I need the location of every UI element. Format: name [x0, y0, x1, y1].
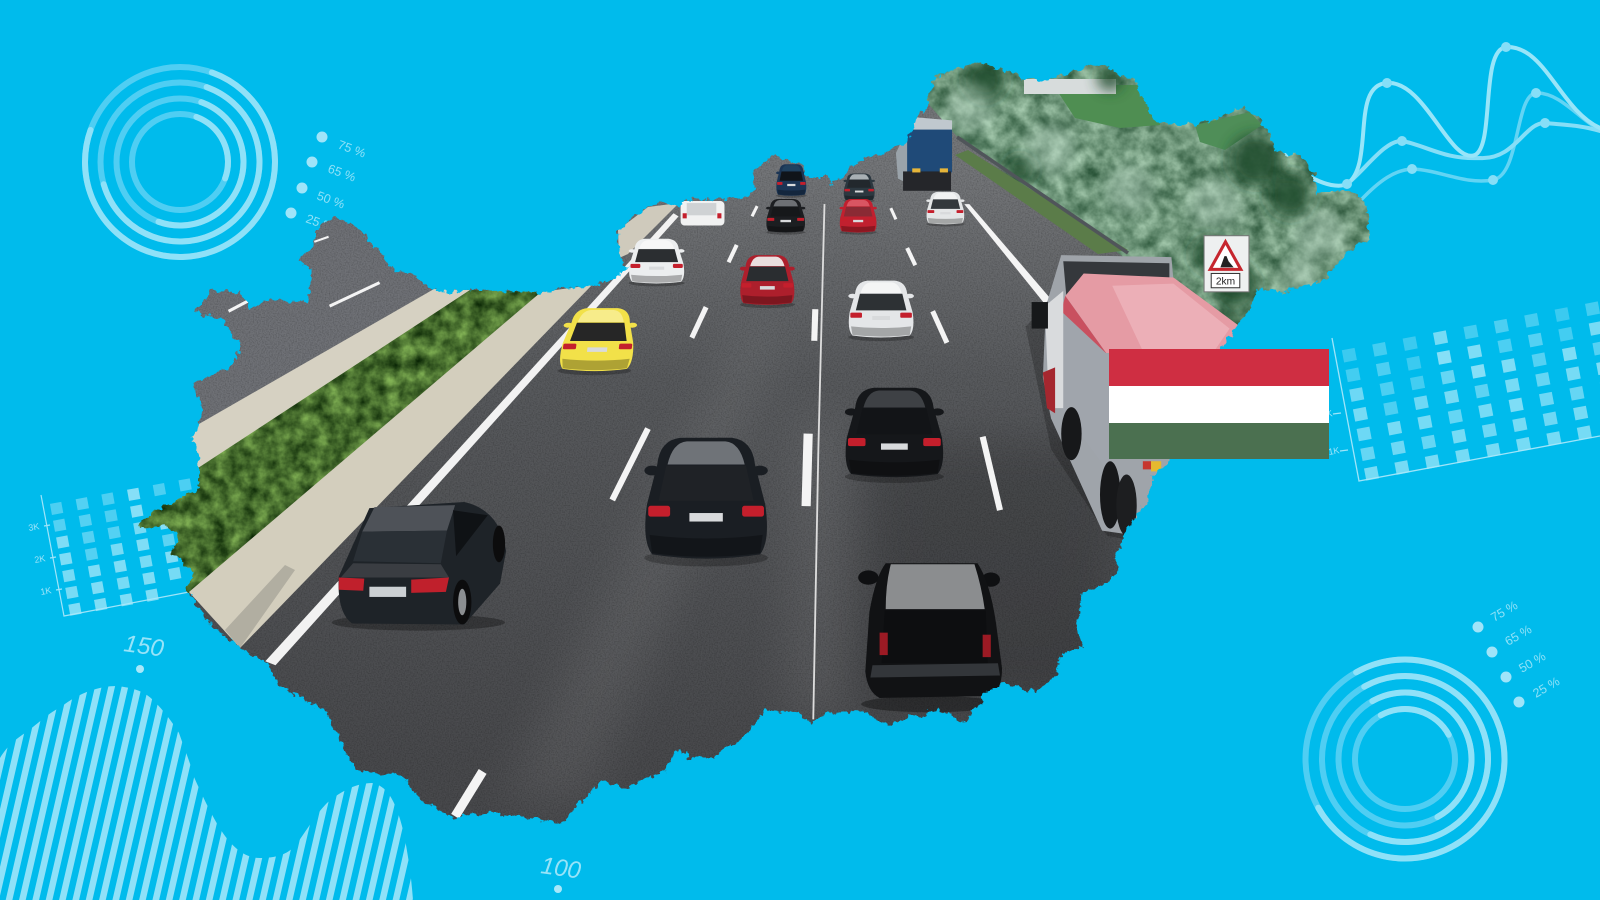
far carriageway [194, 251, 434, 424]
dark trees [965, 60, 1312, 342]
white car [629, 239, 685, 286]
left concrete barrier [185, 289, 470, 470]
worn lane streaks [530, 449, 836, 790]
grey car far [844, 173, 875, 203]
legend: top left percentages: 65 % [326, 162, 358, 185]
asphalt grain [190, 105, 1122, 824]
black sedan [332, 502, 506, 631]
red car [740, 255, 795, 308]
dark SUV [644, 438, 768, 566]
legend: bottom right percentages: 65 % [1502, 622, 1534, 649]
map of Hungary filled with motorway photo [100, 40, 1400, 840]
square grid chart: left: 2K [34, 553, 46, 565]
white car far [926, 192, 965, 226]
right concrete barrier [189, 285, 592, 648]
light foliage highlights [946, 84, 1346, 293]
label: 150: 150 [122, 630, 166, 663]
square grid chart: left: 1K [40, 585, 52, 597]
legend: top left percentages: 25 % [304, 212, 336, 235]
solid lane edge left [265, 213, 679, 665]
legend: bottom right percentages: 25 % [1530, 674, 1562, 701]
upper concrete barrier [618, 203, 679, 258]
centre solid line [813, 204, 824, 719]
legend: top left percentages [286, 132, 368, 235]
black hatchback [858, 563, 1002, 712]
legend: bottom right percentages: 75 % [1488, 598, 1520, 625]
legend: bottom right percentages: 50 % [1516, 649, 1548, 676]
square grid chart: right: 1K [1328, 445, 1340, 457]
square grid chart: right: 2K [1321, 408, 1333, 420]
donut chart: bottom right rings [1270, 624, 1540, 894]
square grid chart: left: 3K [28, 521, 40, 533]
asphalt [188, 104, 1124, 824]
greenhouses [1024, 79, 1116, 94]
legend: top left percentages: 50 % [315, 189, 347, 212]
legend: top left percentages: 75 % [336, 138, 368, 161]
black car right lane [845, 388, 944, 483]
line chart: top right [1285, 42, 1600, 200]
dark car far [766, 199, 805, 235]
red car far [840, 199, 877, 235]
blue truck [896, 117, 952, 191]
yellow car [557, 308, 639, 375]
label: 100: 100 [539, 852, 583, 885]
legend: bottom right percentages [1472, 598, 1562, 708]
grass strip by guardrail [955, 150, 1128, 254]
Hungarian flag [1109, 349, 1329, 459]
striped wave chart: bottom left [0, 686, 413, 900]
articulated truck with red tarp [1026, 255, 1243, 541]
road works sign [1204, 236, 1249, 292]
white van [681, 201, 724, 226]
donut chart: top left rings [58, 40, 302, 284]
trees and fields [926, 62, 1370, 325]
white SUV [848, 281, 914, 341]
solid lane edge right [964, 204, 1050, 304]
guardrail [957, 137, 1128, 253]
road scene [229, 117, 1249, 816]
road works sign: 2km [1216, 277, 1235, 288]
asphalt shadow right lanes [874, 442, 1115, 692]
dashed lane markings [229, 206, 1000, 816]
square grid chart: left [28, 478, 210, 616]
field [1060, 85, 1160, 128]
square grid chart: right [1321, 301, 1600, 481]
grass median [120, 290, 545, 594]
navy car far [776, 164, 807, 198]
